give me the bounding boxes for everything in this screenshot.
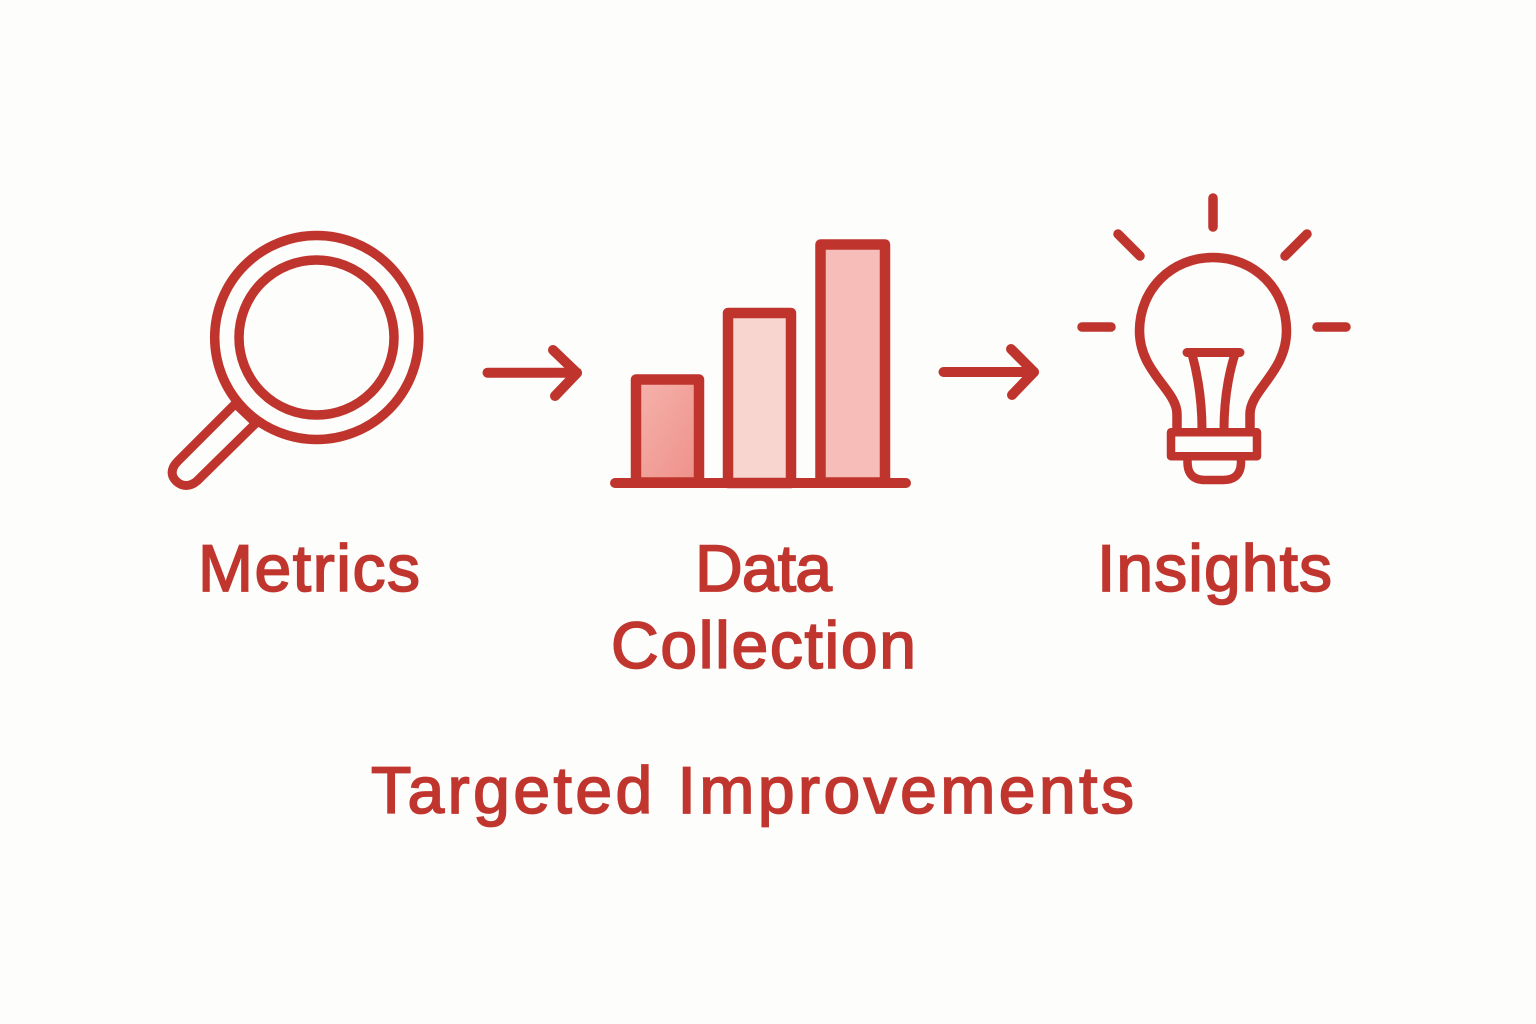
label: Data Collection: Data: [695, 531, 832, 605]
bar: short: [636, 380, 699, 482]
icon: light bulb: [1082, 198, 1346, 480]
screw base: [1171, 432, 1257, 456]
label: Insights: Insights: [1097, 531, 1332, 605]
arrow: metrics to data collection: [488, 350, 577, 396]
heading: Targeted Improvements: Targeted Improvements: [371, 753, 1134, 827]
chart baseline: [615, 478, 906, 488]
bar: medium: [728, 313, 791, 483]
arrow: data collection to insights: [944, 349, 1034, 395]
light rays: [1082, 198, 1346, 327]
filament: [1187, 352, 1240, 430]
base cap: [1188, 458, 1241, 480]
bar: tall: [820, 244, 885, 482]
label: Data Collection: [611, 531, 916, 682]
label: Metrics: Metrics: [198, 531, 420, 605]
label: Data Collection: Collection: [611, 608, 916, 682]
icon: bar chart: [615, 244, 906, 483]
icon: magnifying glass: [172, 236, 419, 486]
bulb glass: [1140, 258, 1286, 430]
